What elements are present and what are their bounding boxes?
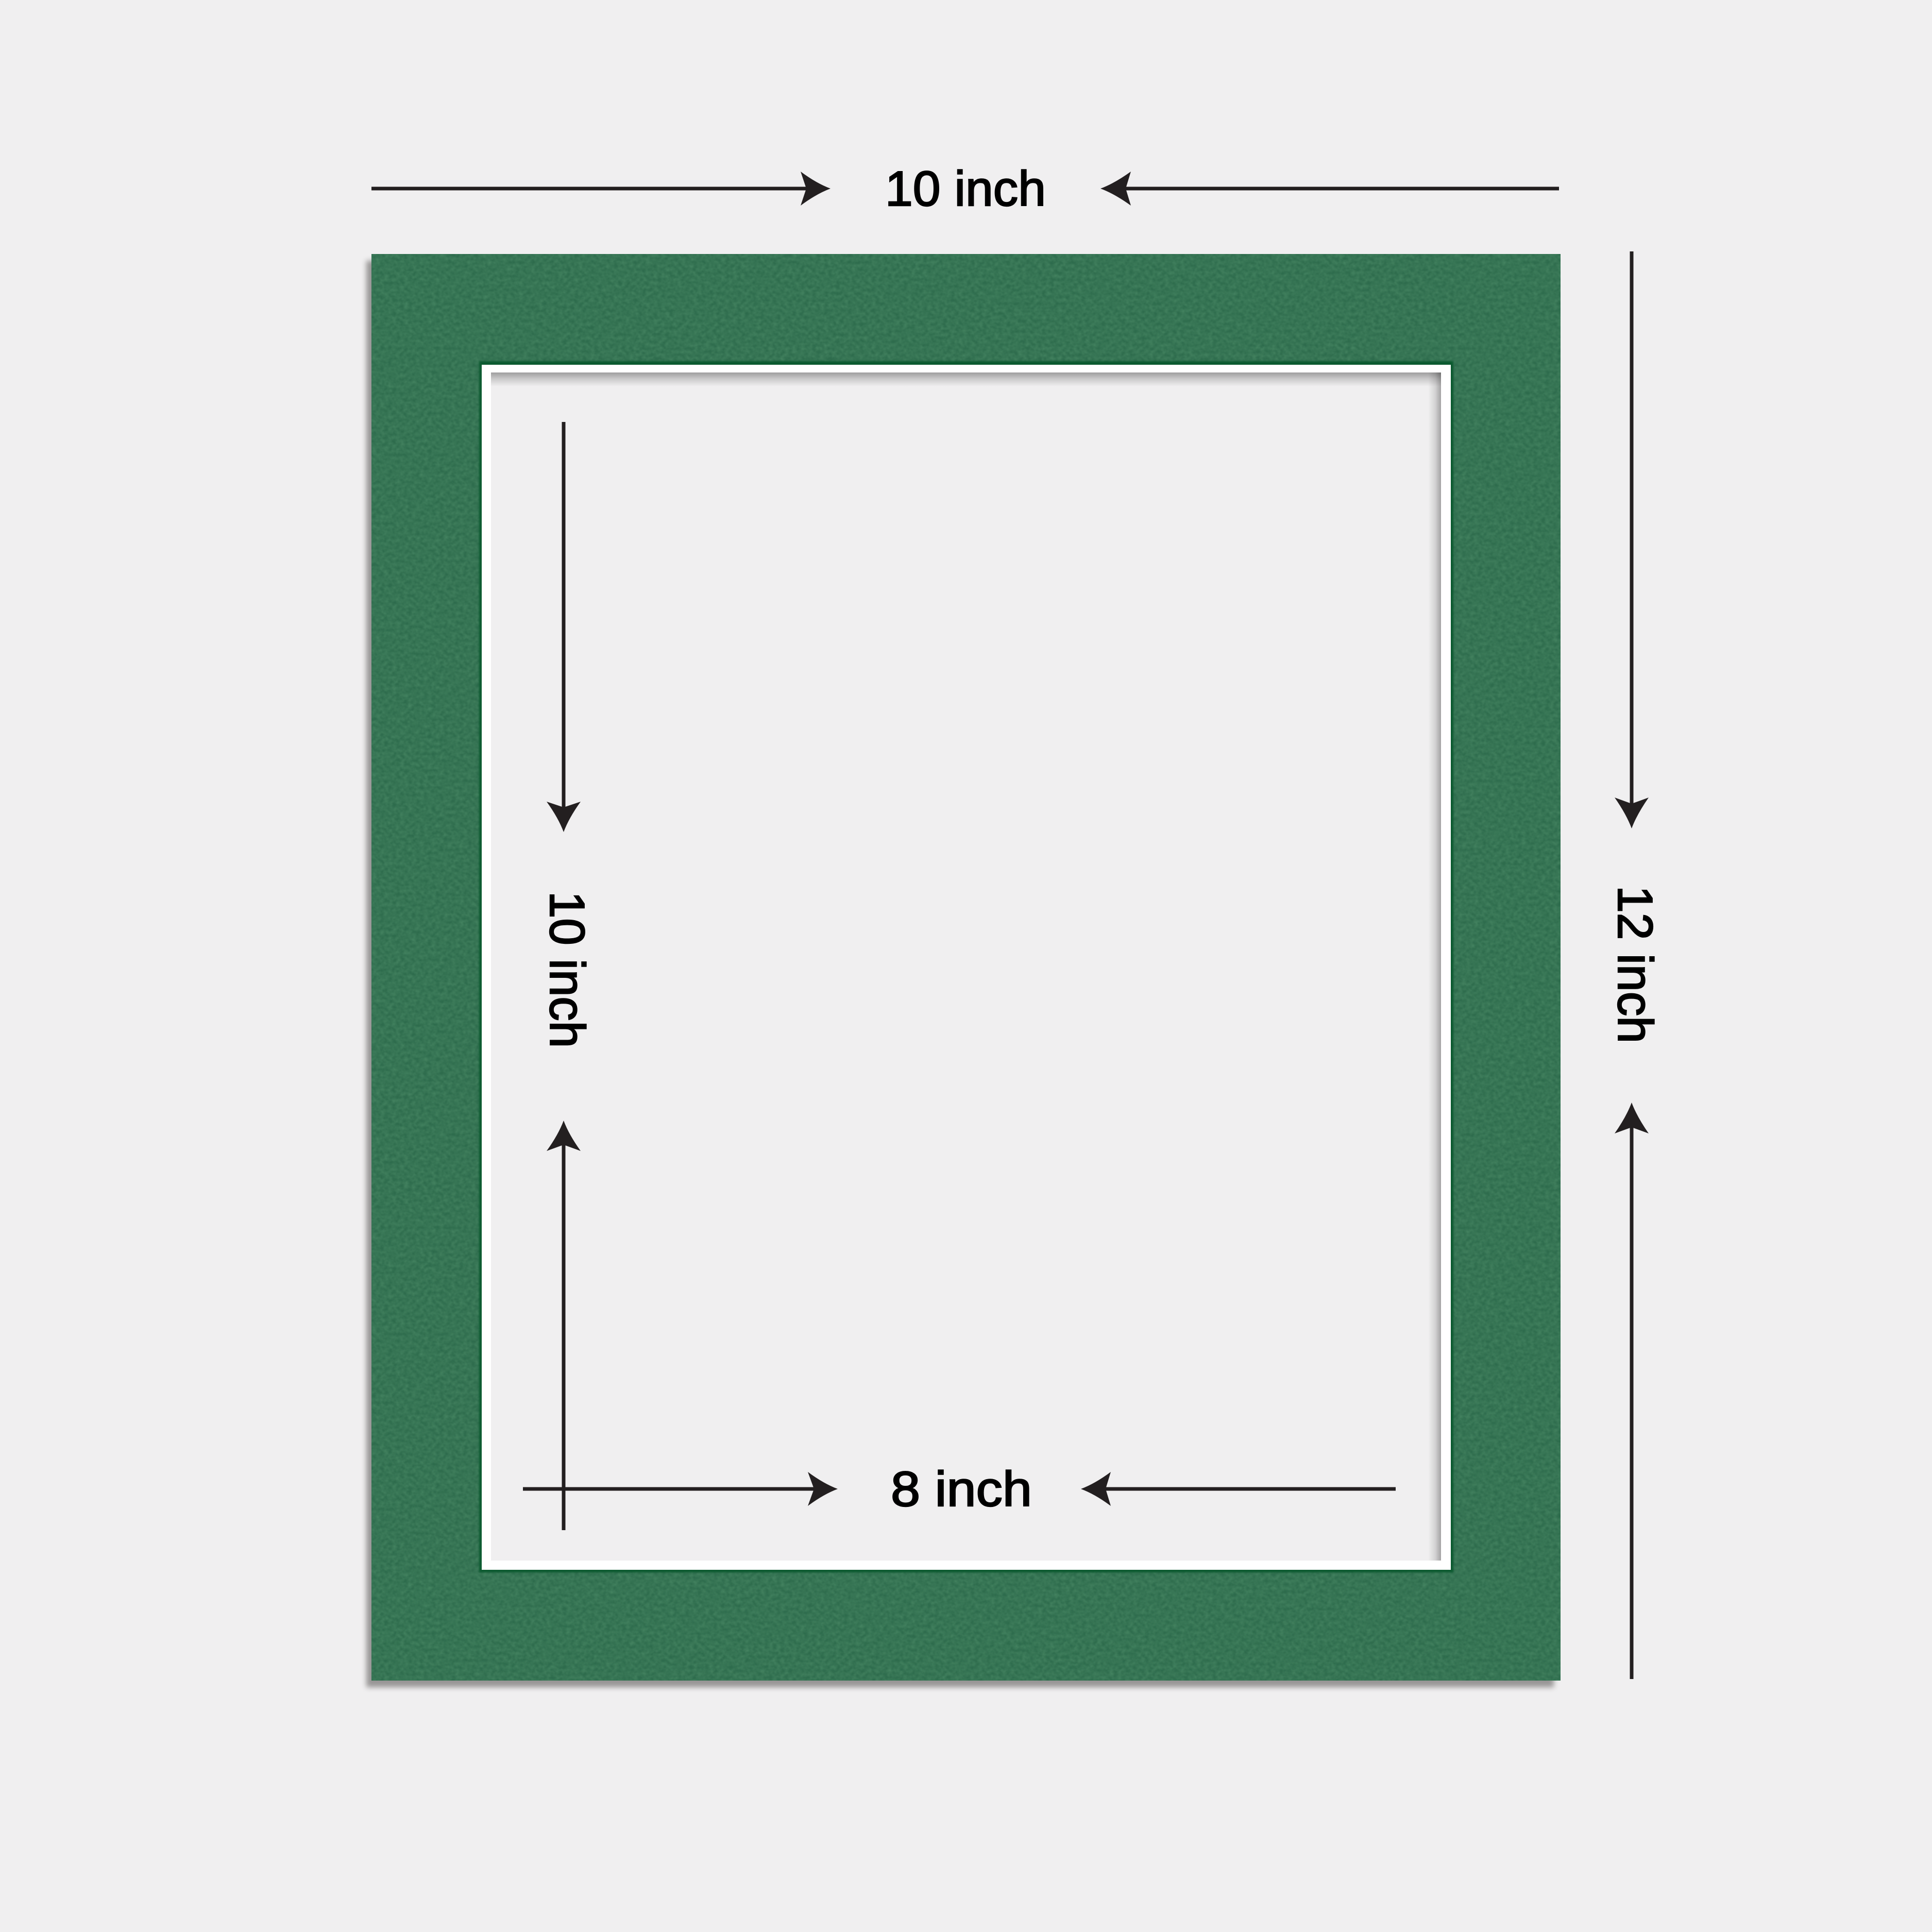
arrow: right dimension, lower	[1615, 1103, 1649, 1679]
opening right inner shadow	[1428, 372, 1441, 1561]
label: mat width: 10 inch	[885, 161, 1046, 216]
panel: green photo mat	[366, 254, 1561, 1687]
mat paper texture	[371, 254, 1561, 1681]
arrow: inner height, upper	[547, 422, 581, 832]
opening top inner shadow	[491, 372, 1441, 386]
label: opening width: 8 inch	[891, 1462, 1032, 1517]
arrow: inner width, left	[523, 1472, 838, 1506]
arrow: top dimension, left	[371, 172, 831, 206]
arrow: inner width, right	[1081, 1472, 1396, 1506]
label: mat height: 12 inch	[1607, 886, 1663, 1043]
mat green board	[371, 254, 1561, 1681]
arrow: inner height, lower	[547, 1121, 581, 1530]
label: opening height: 10 inch	[539, 891, 595, 1048]
arrow: right dimension, upper	[1615, 251, 1649, 828]
opening dark cut edge	[479, 361, 1453, 1572]
opening	[491, 372, 1441, 1561]
white bevel	[482, 365, 1451, 1570]
arrow: top dimension, right	[1100, 172, 1559, 206]
mat drop shadow	[366, 261, 1554, 1687]
